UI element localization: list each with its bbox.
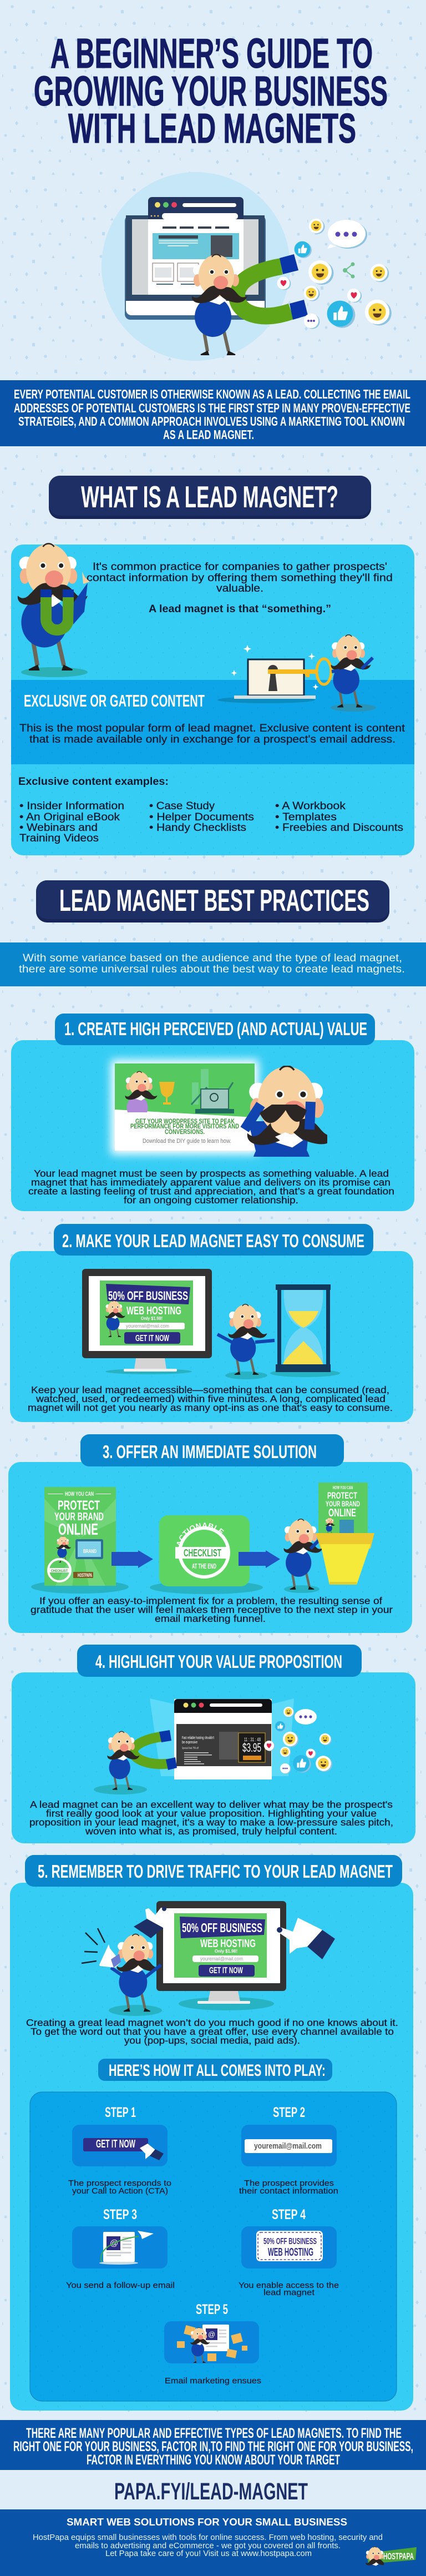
ebook cover: [31, 1487, 129, 1594]
exclusive content band: [11, 680, 414, 764]
heading pill 5: [25, 1855, 402, 1887]
browser with sales page: [150, 1698, 294, 1779]
examples list: Exclusive content examples:: [18, 776, 169, 788]
monitor with offer: GET IT NOW: [135, 1334, 170, 1343]
step 2: [239, 2105, 338, 2196]
panel: 1 create high perceived value: [11, 1014, 414, 1228]
intro text: It's common practice for companies to gather prospects': [93, 561, 387, 573]
ebook cover: YOUR BRAND: [54, 1511, 104, 1523]
exclusive content paragraph: [19, 723, 405, 745]
footer copy: emails to advertising and eCommerce - we got you covered on all fronts.: [75, 2541, 341, 2550]
examples list: • Templates: [275, 811, 337, 823]
step 5: Email marketing ensues: [165, 2376, 261, 2386]
step 4: [239, 2207, 339, 2297]
chart and laptop graphic: [191, 1069, 234, 1113]
paragraph 4: A lead magnet can be an excellent way to deliver what may be the prospect's: [30, 1799, 393, 1810]
heading: what is a lead magnet: [49, 476, 371, 519]
paragraph 3: email marketing funnel.: [155, 1613, 266, 1624]
reaction icons: [264, 1707, 332, 1774]
paragraph 4: woven into what is, as promised, truly helpful content.: [85, 1826, 337, 1837]
card copy: CONVERSIONS.: [165, 1129, 205, 1136]
Papa with magnet: [94, 1730, 177, 1794]
paragraph 3: [31, 1595, 393, 1624]
funnel with ebook: YOUR BRAND: [326, 1499, 360, 1508]
step 2: The prospect provides: [244, 2179, 334, 2188]
lead magnet landing card: [111, 1060, 258, 1155]
ebook cover: PROTECT: [58, 1498, 100, 1513]
intro text: contact information by offering them something they'll find: [87, 572, 393, 584]
examples list: • Webinars and: [19, 822, 98, 834]
monitor with offer: youremail@mail.com: [200, 1956, 243, 1962]
step 3: STEP 3: [103, 2207, 137, 2222]
browser with sales page: be expensive: [182, 1741, 197, 1745]
examples list: • An Original eBook: [19, 811, 120, 823]
paragraph 1: magnet that has immediately apparent value and delivers on its promise can: [31, 1177, 390, 1188]
paragraph 2: Keep your lead magnet accessible—something that can be consumed (read,: [31, 1384, 389, 1395]
step 4: You enable access to the: [239, 2281, 339, 2290]
intro text: A lead magnet is that “something.”: [149, 603, 331, 615]
intro band: [0, 380, 426, 446]
examples list: • Freebies and Discounts: [275, 822, 403, 834]
best practices intro band: [0, 942, 426, 986]
step 2: their contact information: [239, 2186, 338, 2196]
examples list: • Case Study: [149, 800, 215, 812]
panel: 3 offer an immediate solution: [8, 1434, 412, 1633]
footer copy: [33, 2533, 383, 2558]
Papa with megaphone: [82, 1928, 162, 2016]
heading pill 1: [55, 1014, 375, 1045]
card copy: [130, 1118, 239, 1136]
small Papa with key: [331, 635, 376, 712]
step 4: 50% OFF BUSINESS: [263, 2237, 317, 2246]
actionable checklist stamp: AT THE END: [192, 1562, 216, 1570]
paragraph 3: gratitude that the user will feel makes them receptive to the next step in your: [31, 1604, 393, 1615]
monitor with offer: WEB HOSTING: [200, 1938, 256, 1950]
browser with sales page: Special Deal 75% off: [182, 1747, 199, 1750]
step 1: GET IT NOW: [96, 2138, 135, 2150]
browser with sales page: 11 : 31 : 48: [244, 1737, 261, 1742]
examples list: • A Workbook: [275, 800, 346, 812]
card copy: GET YOUR WORDPRESS SITE TO PEAK: [135, 1118, 235, 1125]
intro band: AS A LEAD MAGNET.: [163, 427, 254, 442]
step 5: STEP 5: [196, 2302, 228, 2317]
monitor with offer: youremail@mail.com: [126, 1323, 169, 1329]
lead magnet landing card: Download the DIY guide to learn how.: [143, 1138, 231, 1145]
paragraph 5: Creating a great lead magnet won’t do you much good if no one knows about it.: [26, 2017, 398, 2028]
ebook cover: HOW YOU CAN: [65, 1491, 94, 1498]
link: [0, 2470, 426, 2509]
card copy: PERFORMANCE FOR MORE VISITORS AND: [130, 1123, 239, 1130]
paragraph 1: for an ongoing customer relationship.: [124, 1194, 298, 1206]
step 4: WEB HOSTING: [268, 2246, 313, 2259]
paragraph 5: To get the word out that you have a great offer, use every channel available to: [31, 2026, 394, 2037]
paragraph 3: If you offer an easy-to-implement fix for a problem, the resulting sense of: [39, 1595, 382, 1606]
footer heading: SMART WEB SOLUTIONS FOR YOUR SMALL BUSINESS: [67, 2517, 347, 2528]
examples list: • Handy Checklists: [149, 822, 246, 834]
ebook cover: BRAND: [83, 1549, 97, 1555]
title: [34, 30, 388, 152]
Papa with funnel: [283, 1519, 323, 1593]
tablet with landing page: [125, 197, 266, 320]
monitor with offer: WEB HOSTING: [126, 1305, 181, 1317]
ebook cover: ONLINE: [58, 1521, 98, 1539]
big Papa: [241, 1066, 327, 1157]
funnel with ebook: PROTECT: [327, 1490, 357, 1501]
exclusive content paragraph: that is made available only in exchange for a prospect's email address.: [29, 734, 395, 745]
heading pill 4: [77, 1645, 362, 1677]
heading pill 2: [54, 1224, 373, 1256]
sparkles: [231, 645, 318, 690]
monitor with offer: 50% OFF BUSINESS: [182, 1920, 262, 1935]
hero backdrop circle: [102, 172, 290, 361]
footer copy: HostPapa equips small businesses with tools for online success. From web hosting, security and: [33, 2533, 383, 2542]
intro text: [87, 561, 393, 615]
paragraph 2: watched, used, or redeemed) within five minutes. A long, complicated lead: [36, 1393, 386, 1404]
small Papa on card: [125, 1071, 158, 1112]
laptop with key: [217, 659, 331, 703]
browser with sales page: $3.95: [242, 1741, 261, 1755]
step 3: [66, 2207, 175, 2290]
link: PAPA.FYI/LEAD-MAGNET: [114, 2478, 308, 2505]
hero illustration: Papa with magnet attracting reactions: [102, 172, 392, 361]
paragraph 2: [28, 1384, 393, 1413]
exclusive content paragraph: This is the most popular form of lead magnet. Exclusive content is content: [19, 723, 405, 734]
arrow: checklist to funnel: [239, 1550, 280, 1568]
reaction icons: [277, 219, 392, 329]
panel: what is a lead magnet: [11, 543, 414, 855]
heading pill 3: [80, 1434, 344, 1466]
paragraph 4: [29, 1799, 393, 1837]
paragraph 2: magnet will not get you nearly as many opt-ins as one that's easy to consume.: [28, 1402, 393, 1413]
Papa beside hourglass: [217, 1304, 275, 1379]
step 3: @: [110, 2239, 118, 2248]
actionable checklist stamp: CHECKLIST: [184, 1547, 221, 1559]
paragraph 4: proposition in your lead magnet, it's a way to make a low-pressure sales pitch,: [29, 1817, 393, 1828]
intro text: valuable.: [216, 583, 263, 594]
how it all comes into play pill: HERE’S HOW IT ALL COMES INTO PLAY:: [109, 2061, 326, 2080]
step 1: [68, 2105, 171, 2196]
paragraph 4: first really good look at your value proposition. Highlighting your value: [46, 1808, 377, 1819]
examples list: • Helper Documents: [149, 811, 254, 823]
examples list: [18, 776, 403, 844]
ebook cover: HOSTPAPA: [78, 1572, 92, 1578]
examples list: Training Videos: [19, 833, 99, 844]
funnel with ebook: ONLINE: [328, 1507, 356, 1519]
paragraph 5: you (pop-ups, social media, paid ads).: [124, 2035, 300, 2046]
step 2: STEP 2: [273, 2105, 305, 2120]
monitor with offer: GET IT NOW: [209, 1966, 244, 1975]
best practices intro band: there are some universal rules about the best way to create lead magnets.: [19, 964, 405, 975]
step 5: @: [208, 2330, 215, 2338]
how it all comes into play pill: [98, 2059, 332, 2081]
funnel with ebook: [316, 1483, 374, 1585]
Papa holding magnet: [18, 543, 90, 677]
actionable checklist stamp: [150, 1515, 263, 1594]
paragraph 5: [26, 2017, 398, 2046]
step 5: [164, 2302, 261, 2386]
step 1: The prospect responds to: [68, 2179, 171, 2188]
hourglass: [270, 1284, 340, 1377]
ebook cover: CHECKLIST: [51, 1569, 68, 1573]
panel: 4 highlight your value proposition: [12, 1645, 415, 1843]
monitor with offer: [156, 1901, 286, 2010]
actionable checklist stamp: ACTIONABLE: [176, 1523, 224, 1545]
heading pill 3: 3. OFFER AN IMMEDIATE SOLUTION: [103, 1441, 317, 1462]
examples list: • Insider Information: [19, 800, 124, 812]
magnet: [237, 254, 308, 320]
footer copy: Let Papa take care of you! Visit us at www.hostpapa.com: [105, 2549, 312, 2558]
arrow: ebook to checklist: [111, 1550, 153, 1568]
closing band: [0, 2420, 426, 2470]
HostPapa logo: [366, 2547, 417, 2566]
footer: [0, 2509, 426, 2576]
browser with sales page: Fast reliable hosting shouldn't: [182, 1736, 214, 1740]
step 4: lead magnet: [263, 2288, 315, 2297]
funnel with ebook: HOW YOU CAN: [333, 1485, 353, 1490]
monitor with offer: 50% OFF BUSINESS: [108, 1289, 188, 1303]
paragraph 1: [28, 1168, 394, 1206]
monitor with offer: [82, 1269, 212, 1374]
paragraph 1: create a lasting feeling of trust and appreciation, and that’s a great foundation: [28, 1186, 394, 1197]
steps panel: [30, 2092, 397, 2401]
monitor with offer: Only $1.98!: [215, 1949, 237, 1954]
panel: 2 make your lead magnet easy to consume: [10, 1224, 413, 1422]
trophy: [159, 1082, 175, 1105]
paragraph 1: Your lead magnet must be seen by prospects as something valuable. A lead: [34, 1168, 389, 1179]
subheading: exclusive or gated content: EXCLUSIVE OR GATED CONTENT: [24, 691, 205, 710]
step 4: STEP 4: [272, 2207, 306, 2222]
Papa: [192, 254, 247, 355]
best practices intro band: With some variance based on the audience and the type of lead magnet,: [23, 952, 402, 964]
panel: 5 remember to drive traffic: [10, 1855, 413, 2411]
monitor with offer: Only $1.98!: [141, 1316, 163, 1321]
step 2: youremail@mail.com: [254, 2141, 322, 2151]
step 1: STEP 1: [105, 2105, 136, 2120]
step 3: You send a follow-up email: [66, 2281, 175, 2290]
pointing hands: [134, 1907, 335, 1959]
step 1: your Call to Action (CTA): [72, 2186, 168, 2196]
